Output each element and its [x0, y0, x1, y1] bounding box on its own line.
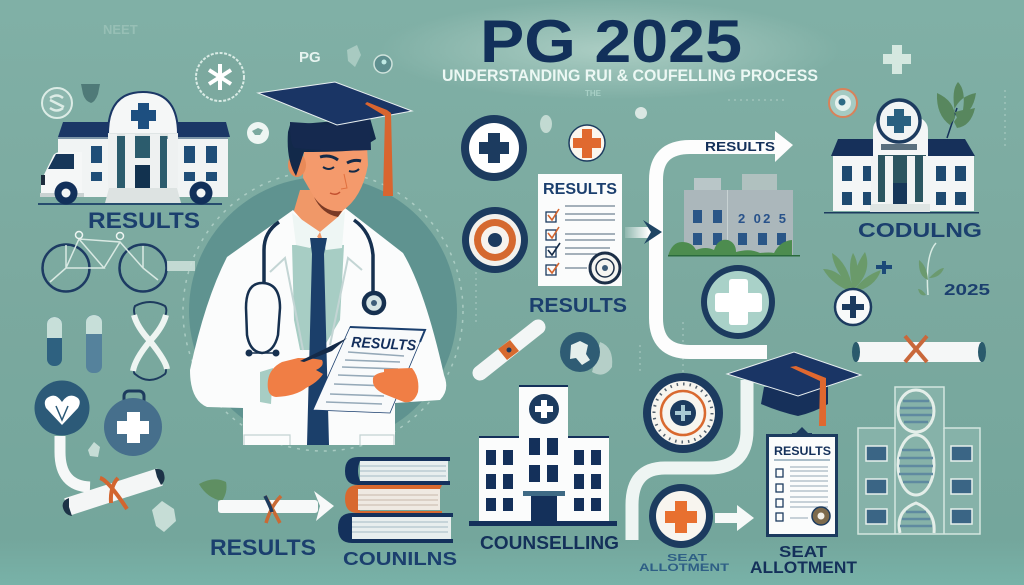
- icon: orange eye badge: [829, 89, 857, 117]
- icon: bandage pill: [480, 327, 538, 373]
- results paper: RESULTS: [351, 334, 417, 354]
- road: results flow: [656, 131, 793, 352]
- ear: [288, 153, 306, 177]
- stethoscope: [246, 220, 384, 353]
- title: PG 2025: [480, 8, 742, 75]
- icon: stack of books: [338, 457, 453, 543]
- label: small seat allotment: ALLOTMENT: [639, 562, 729, 574]
- results checklist document: RESULTS: [543, 181, 617, 198]
- coat pockets: [244, 435, 394, 445]
- graduation cap: [290, 118, 371, 151]
- collar: [292, 211, 345, 250]
- small crystal icons left: [88, 442, 176, 532]
- icon: heart circle: [34, 380, 90, 436]
- icon: no-sign circle: [42, 88, 72, 118]
- small faint labels: PG: [299, 49, 321, 66]
- subtitle: UNDERSTANDING RUI & COUFELLING PROCESS: [442, 66, 818, 85]
- face: [303, 146, 368, 211]
- icon: small plus: [876, 261, 892, 274]
- icon: globe circle: [560, 332, 612, 375]
- neck: [293, 190, 346, 250]
- icon: glass orb near PG: [347, 45, 392, 73]
- icon: leaf on right hospital: [937, 82, 976, 138]
- results paper: [313, 327, 425, 413]
- results clipboard: RESULTS: [774, 446, 831, 458]
- connector: white curved path: [60, 436, 90, 487]
- label: results center: RESULTS: [529, 295, 627, 317]
- icon: medical plus top right: [883, 45, 911, 74]
- backdrop circle: [189, 177, 457, 445]
- icon: droplets: [540, 107, 647, 133]
- icon: speech bubble: [247, 122, 269, 144]
- icon: bicycle: [42, 232, 166, 292]
- hospital right: coduling: [824, 100, 979, 214]
- truck: [41, 152, 82, 195]
- white coat: [190, 208, 446, 445]
- label: large seat allotment: ALLOTMENT: [750, 558, 858, 577]
- label: coduling: CODULNG: [858, 220, 982, 242]
- eyes and mouth: [320, 156, 361, 163]
- road: results flow: RESULTS: [705, 139, 775, 154]
- small faint labels: THE: [585, 89, 602, 98]
- label: counselling: COUNSELLING: [480, 533, 619, 553]
- necktie: [307, 238, 329, 445]
- icon: orange cross circle: [569, 125, 605, 161]
- label: small seat allotment: [639, 553, 729, 574]
- icon: shield: [81, 84, 100, 103]
- cuff: [260, 368, 273, 404]
- icon: diploma scroll right: [852, 336, 986, 362]
- hair: [288, 118, 376, 176]
- arrow: scroll to books: [218, 491, 334, 523]
- icon: large plus circle: [701, 265, 775, 339]
- icon: vials: [47, 315, 102, 373]
- icon: leaf over arrow: [199, 479, 226, 501]
- icon: medical bag: [104, 391, 162, 456]
- label: small seat allotment: SEAT: [667, 553, 707, 564]
- arrow: seat to clipboard: [715, 505, 754, 531]
- icon: diploma scroll left: [63, 469, 165, 516]
- graduation cap lower: [727, 352, 861, 426]
- arrow: chevron into road: [625, 220, 662, 244]
- label: results left: RESULTS: [88, 208, 200, 233]
- label: counlns: COUNILNS: [343, 549, 457, 569]
- icon: star emblem: [196, 53, 244, 101]
- small faint labels: NEET: [103, 22, 138, 37]
- coat lapels: [270, 258, 362, 350]
- dna panel: [858, 387, 980, 534]
- icon: ribbon figure eight: [133, 302, 167, 380]
- results clipboard: [766, 427, 838, 537]
- shirt: [292, 245, 344, 350]
- road: to seat allotment: [632, 380, 747, 540]
- left hospital with truck: [38, 92, 230, 205]
- panel: graduate student reading results: [183, 82, 463, 451]
- icon: plant with plus: [823, 252, 881, 325]
- icon: plus circle: [461, 115, 527, 181]
- label: 2025 right: 2025: [944, 282, 990, 299]
- label: large seat allotment: SEAT: [779, 544, 827, 561]
- hospital: counselling: [469, 385, 617, 526]
- icon: target: [462, 207, 528, 273]
- grey building with 2025: 2 02 5: [738, 211, 786, 226]
- small faint labels: [103, 22, 602, 98]
- right hand: [373, 368, 418, 402]
- label: large seat allotment: [750, 544, 858, 577]
- results checklist document: [538, 174, 622, 286]
- left hand and pen: [268, 358, 323, 397]
- cap tassel: [365, 102, 393, 196]
- icon: dial circle: [643, 373, 723, 453]
- label: results bottom: RESULTS: [210, 535, 316, 560]
- icon: seat cross circle: [649, 484, 713, 548]
- grey building with 2025: [668, 174, 800, 256]
- title: [442, 8, 818, 85]
- icon: sprig: [918, 243, 944, 295]
- connector bar: [167, 261, 195, 271]
